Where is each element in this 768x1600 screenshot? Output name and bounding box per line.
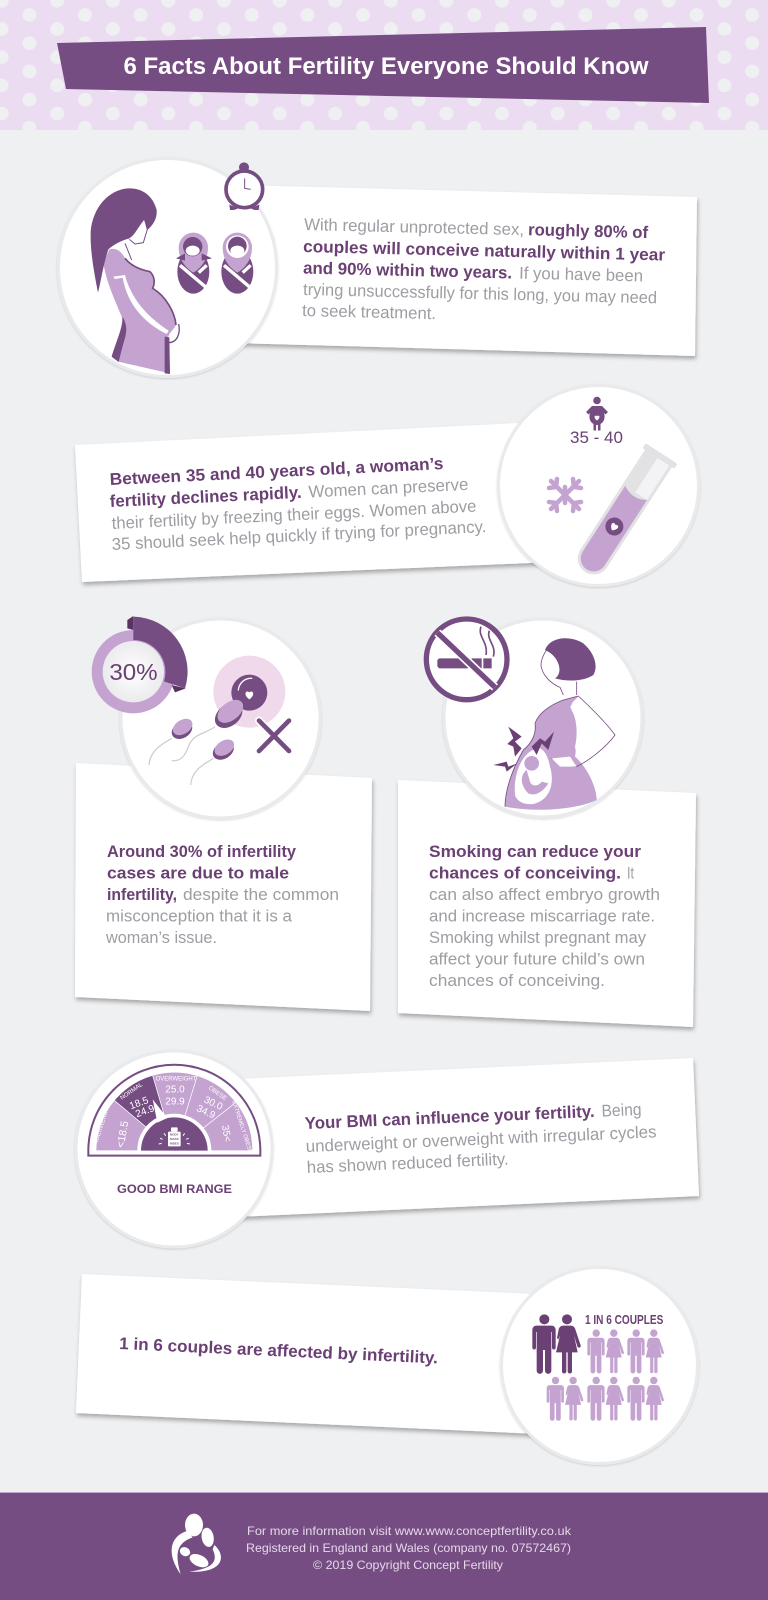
fact 2 text: Women can preserve bbox=[308, 475, 469, 501]
chart: BMI gauge: MASS bbox=[170, 1137, 179, 1141]
chart: BMI gauge: INDEX bbox=[170, 1141, 179, 1145]
icon: pregnant woman side view bbox=[493, 638, 615, 810]
icon: concept fertility logo bbox=[172, 1514, 221, 1574]
fact 1 text: couples will conceive naturally within 1 year bbox=[303, 237, 666, 265]
fact 2 text: Between 35 and 40 years old, a woman’s bbox=[109, 454, 444, 489]
fact 5 circle bbox=[76, 1051, 272, 1247]
fact 4 text: Smoking can reduce your bbox=[429, 842, 641, 861]
chart: BMI gauge: <18.5 bbox=[115, 1120, 131, 1149]
chart: BMI gauge: EXTREMELY OBESE bbox=[230, 1100, 253, 1154]
fact 2 text: 35 should seek help quickly if trying for pregnancy. bbox=[111, 517, 487, 554]
fact 3 text: despite the common bbox=[183, 885, 339, 904]
fact 5 text: underweight or overweight with irregular cycles bbox=[305, 1122, 657, 1156]
icon: cross bbox=[259, 721, 289, 751]
panel: fact 3 male infertility bbox=[75, 616, 372, 1011]
fact 1 text: to seek treatment. bbox=[302, 301, 436, 323]
fact 3 text: cases are due to male bbox=[107, 864, 289, 882]
chart: BMI gauge: 18.5 bbox=[128, 1095, 151, 1112]
chart: BMI gauge: OVERWEIGHT bbox=[156, 1077, 197, 1083]
gauge caption: GOOD BMI RANGE bbox=[117, 1182, 232, 1196]
footer band bbox=[0, 1492, 768, 1600]
chart: BMI gauge: UNDERWEIGHT bbox=[92, 1104, 112, 1149]
fact 4 text: It bbox=[627, 864, 634, 882]
fact 4 text: Smoking whilst pregnant may bbox=[429, 928, 646, 947]
panel: fact 1 regular sex bbox=[58, 158, 697, 376]
footer text: Registered in England and Wales (company no. 07572467) bbox=[246, 1541, 571, 1555]
panel: fact 2 age bbox=[75, 386, 698, 586]
chart: BMI gauge: 34.9 bbox=[195, 1103, 217, 1122]
fact 3 text: Around 30% of infertility bbox=[107, 842, 297, 861]
icon: pregnant figure bbox=[586, 397, 608, 430]
chart: BMI gauge: BODY bbox=[170, 1133, 179, 1137]
fact 3 text bbox=[105, 842, 339, 947]
fact 2 circle bbox=[498, 386, 698, 586]
fact 4 text: chances of conceiving. bbox=[429, 864, 621, 882]
fact 1 text bbox=[302, 215, 666, 323]
fact 3 text: woman’s issue. bbox=[105, 928, 217, 947]
fact 1 text: With regular unprotected sex, bbox=[304, 215, 524, 239]
fact 2 text bbox=[109, 454, 487, 554]
fact 4 text: affect your future child’s own bbox=[429, 950, 645, 968]
fact 1 text: If you have been bbox=[519, 264, 643, 286]
chart: 30 percent donut bbox=[97, 616, 188, 708]
fact 4 text: can also affect embryo growth bbox=[429, 885, 660, 904]
fact 4 text bbox=[429, 842, 660, 990]
fact 3 text: infertility, bbox=[107, 885, 177, 904]
fact 6 text: 1 in 6 couples are affected by infertility. bbox=[119, 1334, 438, 1367]
chart: BMI gauge: NORMAL bbox=[120, 1082, 145, 1102]
icon: snowflake bbox=[549, 479, 581, 511]
fact 5 card bbox=[170, 1058, 699, 1220]
fact 5 text: Your BMI can influence your fertility. bbox=[304, 1102, 595, 1133]
panel: fact 6 one in six bbox=[76, 1268, 698, 1464]
fact 4 card bbox=[398, 780, 696, 1027]
age label: 35 - 40 bbox=[570, 428, 623, 447]
fact 4 text: chances of conceiving. bbox=[429, 971, 605, 990]
fact 6 circle bbox=[502, 1268, 698, 1464]
icon: egg and sperm bbox=[149, 656, 285, 785]
fact 4 text: and increase miscarriage rate. bbox=[429, 906, 655, 926]
fact 2 text: fertility declines rapidly. bbox=[109, 483, 302, 511]
fact 2 card bbox=[75, 419, 600, 582]
fact 1 text: roughly 80% of bbox=[528, 220, 649, 242]
icon: alarm clock bbox=[226, 162, 263, 210]
footer text: © 2019 Copyright Concept Fertility bbox=[313, 1558, 503, 1572]
chart: BMI gauge: OBESE bbox=[207, 1085, 227, 1102]
panel: fact 4 smoking bbox=[398, 619, 696, 1027]
fact 5 text: has shown reduced fertility. bbox=[306, 1150, 509, 1177]
chart: 30 percent donut: 30% bbox=[109, 659, 158, 685]
fact 5 text bbox=[304, 1100, 657, 1177]
chart: BMI gauge: 29.9 bbox=[165, 1097, 185, 1108]
footer text: For more information visit www.www.conceptfertility.co.uk bbox=[247, 1524, 572, 1538]
fact 2 text: their fertility by freezing their eggs. Women above bbox=[111, 497, 477, 533]
fact 1 circle bbox=[58, 158, 276, 376]
header band: dotted background bbox=[0, 0, 768, 130]
fact 5 text: Being bbox=[601, 1100, 642, 1121]
title banner: 6 Facts About Fertility Everyone Should Know bbox=[124, 53, 649, 80]
chart: BMI gauge: 35< bbox=[219, 1124, 233, 1143]
title banner bbox=[57, 27, 709, 103]
panel: fact 5 BMI bbox=[76, 1051, 699, 1247]
fact 3 card bbox=[75, 763, 372, 1011]
footer text bbox=[246, 1524, 572, 1572]
chart: BMI gauge: 24.9 bbox=[134, 1103, 157, 1120]
icon: couples pictogram bbox=[532, 1313, 664, 1421]
fact 1 card bbox=[200, 184, 697, 356]
icon: test tube bbox=[569, 443, 678, 582]
icon: baby boy bbox=[221, 233, 253, 294]
fact 3 text: misconception that it is a bbox=[106, 906, 293, 926]
fact 1 text: and 90% within two years. bbox=[303, 259, 512, 282]
chart: BMI gauge bbox=[88, 1065, 260, 1156]
fact 4 circle bbox=[444, 619, 642, 817]
fact 6 card bbox=[76, 1274, 560, 1435]
icon: no smoking sign bbox=[426, 619, 507, 700]
chart: BMI gauge: 30.0 bbox=[202, 1095, 225, 1113]
fact 3 circle bbox=[121, 619, 320, 818]
chart: BMI gauge: 25.0 bbox=[165, 1085, 185, 1096]
fact 1 text: trying unsuccessfully for this long, you may need bbox=[303, 280, 657, 307]
icon: pregnant woman bbox=[91, 188, 179, 374]
icon: couples pictogram: 1 IN 6 COUPLES bbox=[585, 1313, 663, 1327]
icon: baby girl bbox=[176, 233, 212, 294]
